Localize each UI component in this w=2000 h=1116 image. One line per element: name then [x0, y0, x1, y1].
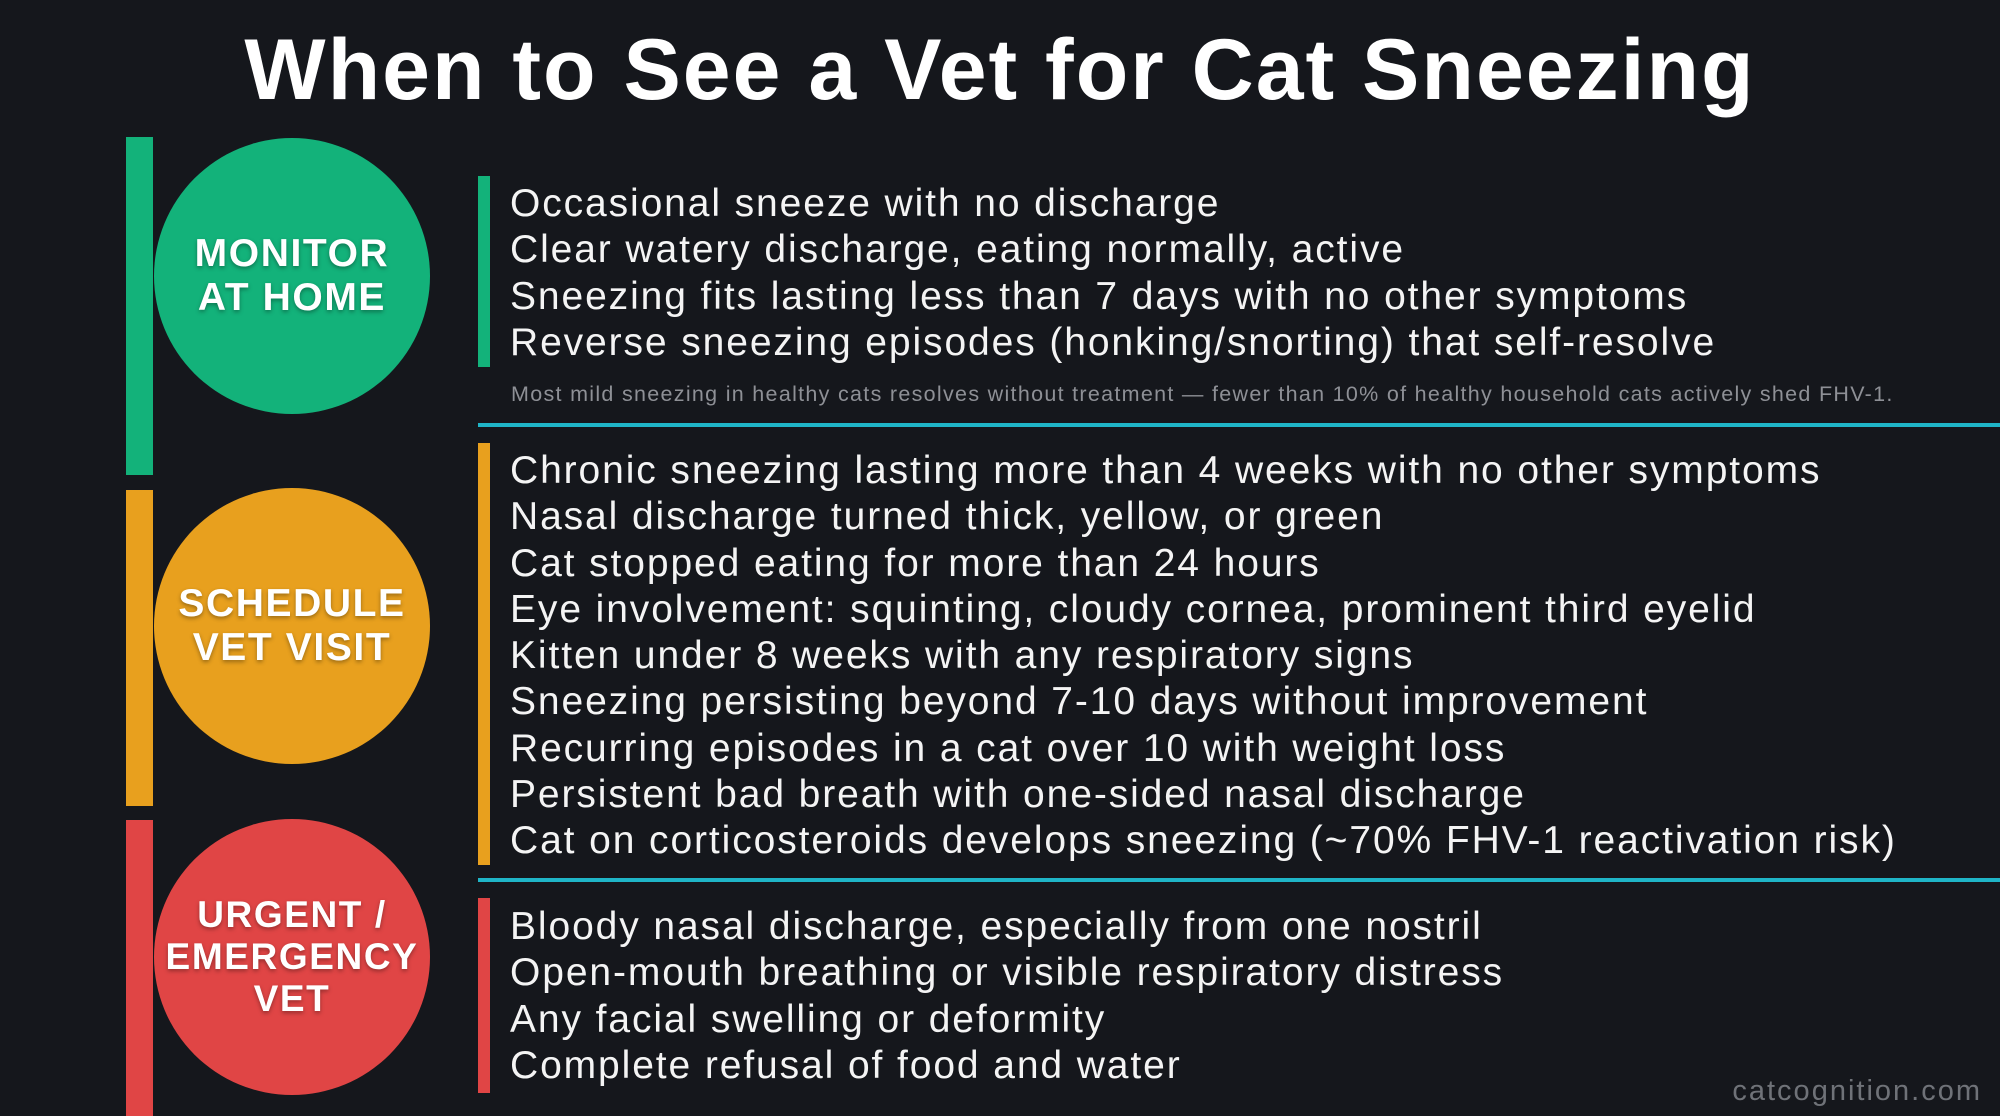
orange text bar: [478, 443, 490, 865]
circle: urgent emergency vet: EMERGENCY: [166, 936, 418, 977]
list: monitor at home: Clear watery discharge, eating normally, active: [510, 228, 1405, 271]
circle: monitor at home: [154, 138, 430, 414]
circle: schedule vet visit: VET VISIT: [193, 626, 391, 669]
list: monitor at home: Reverse sneezing episodes (honking/snorting) that self-resolve: [510, 321, 1716, 364]
list: urgent: [510, 905, 1504, 1087]
circle: monitor at home: MONITOR: [195, 232, 389, 275]
list: schedule vet visit: Cat on corticosteroids develops sneezing (~70% FHV-1 reactivation risk): [510, 819, 1897, 862]
list: schedule vet visit: [510, 449, 1897, 862]
note: Most mild sneezing in healthy cats resolves without treatment — fewer than 10% of healthy household cats actively shed FHV-1.: [511, 382, 1894, 406]
list: monitor at home: [510, 182, 1716, 364]
list: monitor at home: Sneezing fits lasting less than 7 days with no other symptoms: [510, 275, 1688, 318]
circle: schedule vet visit: [154, 488, 430, 764]
red side bar: [126, 820, 153, 1116]
watermark: catcognition.com: [1732, 1075, 1982, 1107]
red text bar: [478, 898, 490, 1093]
circle: monitor at home: AT HOME: [198, 276, 386, 319]
list: schedule vet visit: Nasal discharge turned thick, yellow, or green: [510, 495, 1384, 538]
list: urgent: Any facial swelling or deformity: [510, 998, 1106, 1041]
circle: schedule vet visit: SCHEDULE: [178, 582, 406, 625]
list: schedule vet visit: Eye involvement: squinting, cloudy cornea, prominent third eyelid: [510, 588, 1756, 631]
green text bar: [478, 176, 490, 367]
list: urgent: Bloody nasal discharge, especially from one nostril: [510, 905, 1483, 948]
list: schedule vet visit: Kitten under 8 weeks with any respiratory signs: [510, 634, 1414, 677]
list: schedule vet visit: Chronic sneezing lasting more than 4 weeks with no other symptoms: [510, 449, 1821, 492]
list: schedule vet visit: Persistent bad breath with one-sided nasal discharge: [510, 773, 1526, 816]
list: schedule vet visit: Recurring episodes in a cat over 10 with weight loss: [510, 727, 1506, 770]
green side bar: [126, 137, 153, 475]
list: monitor at home: Occasional sneeze with no discharge: [510, 182, 1220, 225]
list: schedule vet visit: Sneezing persisting beyond 7-10 days without improvement: [510, 680, 1648, 723]
circle: urgent emergency vet: VET: [254, 978, 330, 1019]
title: When to See a Vet for Cat Sneezing: [244, 22, 1756, 118]
orange side bar: [126, 490, 153, 806]
circle: urgent emergency vet: URGENT /: [197, 894, 387, 935]
circle: urgent emergency vet: [154, 819, 430, 1095]
list: urgent: Open-mouth breathing or visible respiratory distress: [510, 951, 1504, 994]
list: schedule vet visit: Cat stopped eating for more than 24 hours: [510, 542, 1321, 585]
list: urgent: Complete refusal of food and water: [510, 1044, 1182, 1087]
